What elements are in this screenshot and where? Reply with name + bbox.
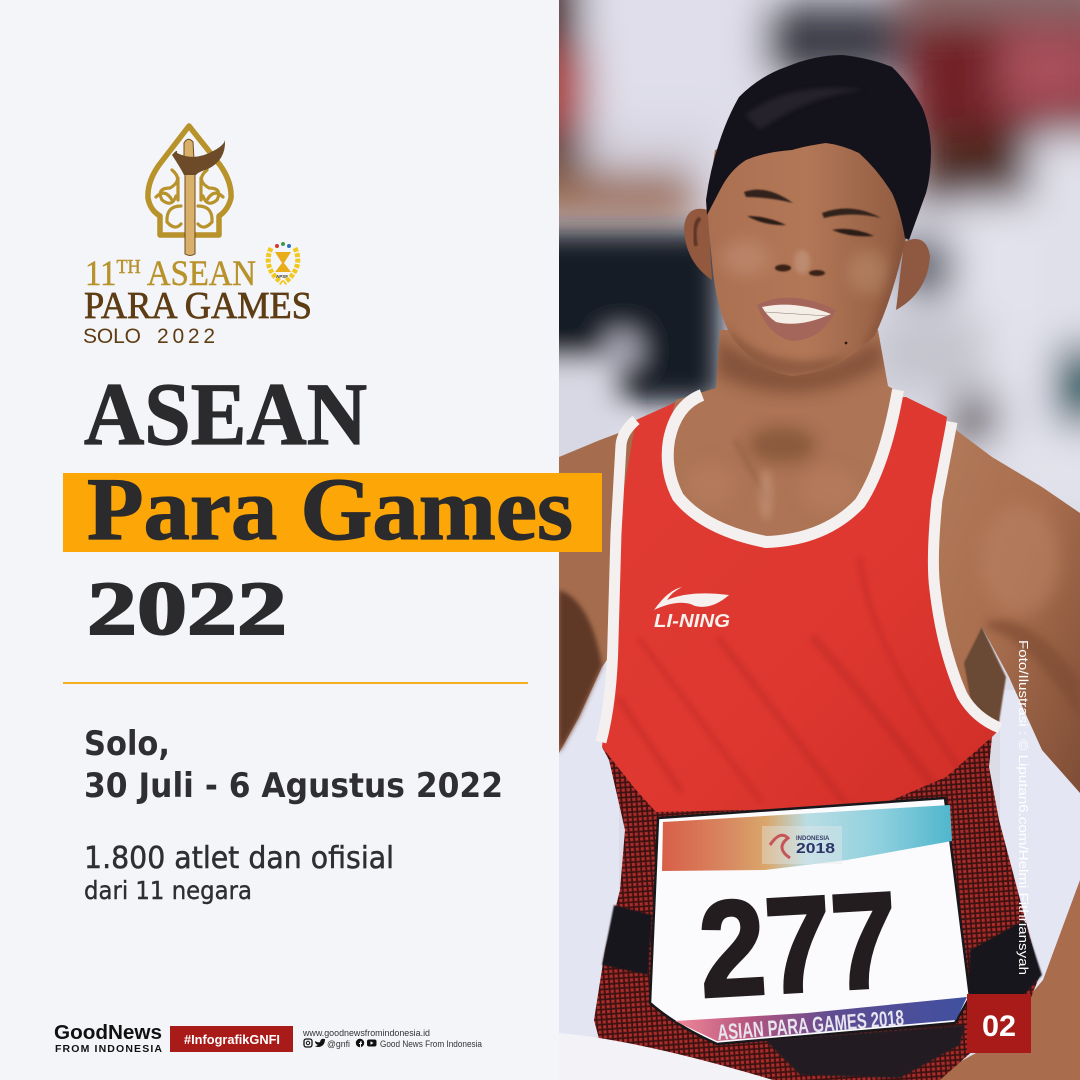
- icon: twitter: [315, 1039, 325, 1047]
- bib colour header: [662, 805, 952, 871]
- icon: youtube: [367, 1040, 376, 1046]
- race bib 277: [650, 798, 970, 1045]
- hair: [706, 55, 931, 240]
- event location and date: 30 Juli - 6 Agustus 2022: [84, 766, 503, 806]
- event location and date: Solo,: [84, 724, 170, 764]
- logo: 11th ASEAN: 11: [85, 253, 120, 293]
- photo credit: Foto/Ilustrasi : © Liputan6.com/Helmi Fithriansyah: [1016, 640, 1031, 975]
- title highlight: Para Games: Para Games: [87, 461, 573, 559]
- social links: [302, 1028, 482, 1049]
- black side panels: [602, 905, 1042, 1078]
- logo: kris dagger: [185, 160, 195, 256]
- bib footer text: ASIAN PARA GAMES 2018: [716, 1005, 905, 1045]
- right arm and shoulder: [925, 420, 1080, 793]
- title: ASEAN: ASEAN: [84, 366, 367, 464]
- title: 2022: 2022: [87, 567, 287, 651]
- icon: instagram: [304, 1039, 312, 1047]
- mesh lower tank top: [594, 737, 1040, 1080]
- bib event logo: 2018: [796, 840, 835, 857]
- event logo: [83, 126, 312, 348]
- Li-Ning logo: [654, 587, 730, 631]
- logo: 11th ASEAN: ASEAN: [141, 253, 256, 293]
- GoodNews from Indonesia logo: [54, 1022, 162, 1055]
- social links: @gnfi: [327, 1039, 350, 1049]
- bib colour footer: [675, 997, 967, 1041]
- logo: APSF emblem: APSF: [276, 274, 288, 279]
- logo: 11th ASEAN: TH: [116, 256, 141, 278]
- GoodNews from Indonesia logo: FROM INDONESIA: [55, 1043, 162, 1055]
- left arm: [559, 425, 640, 753]
- ear left: [684, 209, 712, 280]
- participants info: dari 11 negara: [84, 876, 252, 905]
- bib sheet: [650, 798, 970, 1044]
- logo: year: 2022: [157, 325, 215, 348]
- photo: runner with bib 277: [520, 0, 1080, 1080]
- social links: www.goodnewsfromindonesia.id: [302, 1028, 430, 1038]
- left panel background: [0, 0, 559, 1080]
- logo: Para Games: PARA GAMES: [84, 285, 312, 327]
- page number badge: 02: [982, 1010, 1016, 1043]
- social links: Good News From Indonesia: [380, 1039, 482, 1049]
- white arm trim: [601, 420, 636, 742]
- white neckline trim: [668, 390, 898, 542]
- photo background crowd blur: [520, 0, 1080, 1080]
- event location and date: [84, 724, 503, 806]
- Li-Ning logo: LI-NING: [654, 611, 730, 631]
- bib event logo: [762, 826, 842, 864]
- mouth: [757, 298, 836, 341]
- logo: gunungan emblem: [148, 126, 231, 256]
- chest skin and neck: [667, 330, 898, 547]
- page number badge: [967, 994, 1031, 1053]
- eyes: [747, 216, 786, 225]
- footer: [54, 1022, 482, 1055]
- white cloth at bottom: [559, 1033, 773, 1080]
- participants info: 1.800 atlet dan ofisial: [84, 841, 394, 876]
- ear right: [896, 239, 930, 310]
- icon: facebook: [356, 1039, 364, 1047]
- participants info: [84, 841, 394, 905]
- face: [708, 143, 906, 376]
- track ground: [559, 660, 619, 1060]
- bib event logo: INDONESIA: [796, 836, 830, 842]
- logo: APSF emblem: [268, 242, 298, 283]
- bib number: 277: [695, 863, 901, 1026]
- eyebrows: [744, 190, 793, 203]
- hashtag badge: #InfografikGNFI: [184, 1032, 280, 1047]
- nose: [775, 250, 825, 276]
- GoodNews from Indonesia logo: GoodNews: [54, 1022, 162, 1044]
- red tank top: [602, 397, 999, 812]
- forearm: [927, 880, 1080, 1080]
- logo: Solo 2022: SOLO: [83, 325, 141, 348]
- head: [684, 55, 931, 376]
- hashtag badge: [170, 1026, 293, 1052]
